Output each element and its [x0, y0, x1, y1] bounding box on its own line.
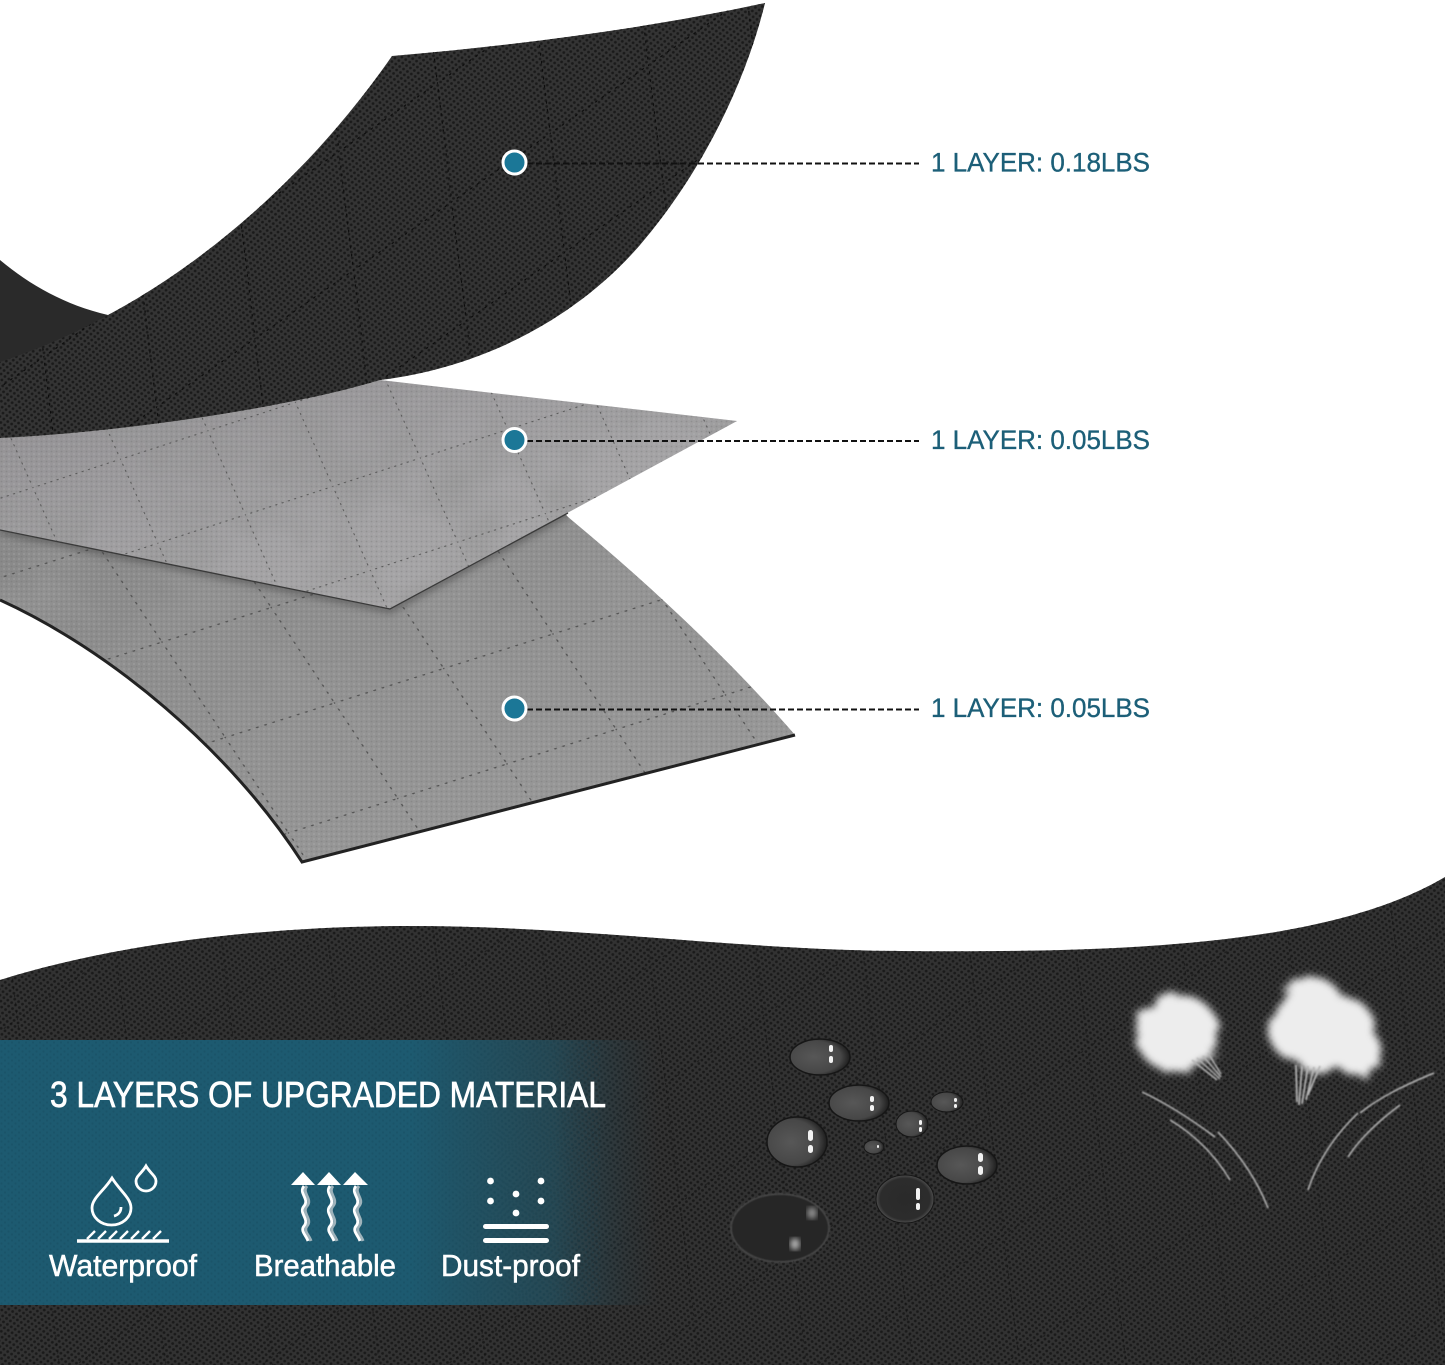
- cotton fluff illustration: [1135, 976, 1434, 1208]
- fabric layer 2: middle light grey sheet: [0, 375, 740, 615]
- icon: waterproof: [77, 1166, 169, 1241]
- water droplets illustration: [731, 1039, 997, 1262]
- fabric layer 3: bottom grey sheet: [0, 495, 800, 865]
- callout: top layer weight: 1 LAYER: 0.18LBS: [931, 148, 1150, 178]
- icon: dust-proof: [483, 1178, 549, 1243]
- fabric base: wide black material at bottom: [0, 870, 1445, 1365]
- callout: middle layer weight: 1 LAYER: 0.05LBS: [931, 425, 1150, 455]
- callout: bottom layer weight: 1 LAYER: 0.05LBS: [931, 693, 1150, 723]
- icon: breathable: [291, 1172, 368, 1241]
- label: breathable: Breathable: [254, 1248, 396, 1283]
- callout: bottom layer weight: [503, 693, 1150, 723]
- fabric layer 1: top black sheet: [0, 0, 770, 440]
- label: waterproof: Waterproof: [49, 1248, 197, 1283]
- callout: top layer weight: [503, 148, 1150, 178]
- label: dust-proof: Dust-proof: [441, 1248, 580, 1283]
- panel heading: 3 LAYERS OF UPGRADED MATERIAL: [50, 1074, 606, 1115]
- callout: middle layer weight: [503, 425, 1150, 455]
- panel: material features: [0, 1040, 660, 1305]
- fabric layer: back fold of the outer sheet: [0, 260, 130, 380]
